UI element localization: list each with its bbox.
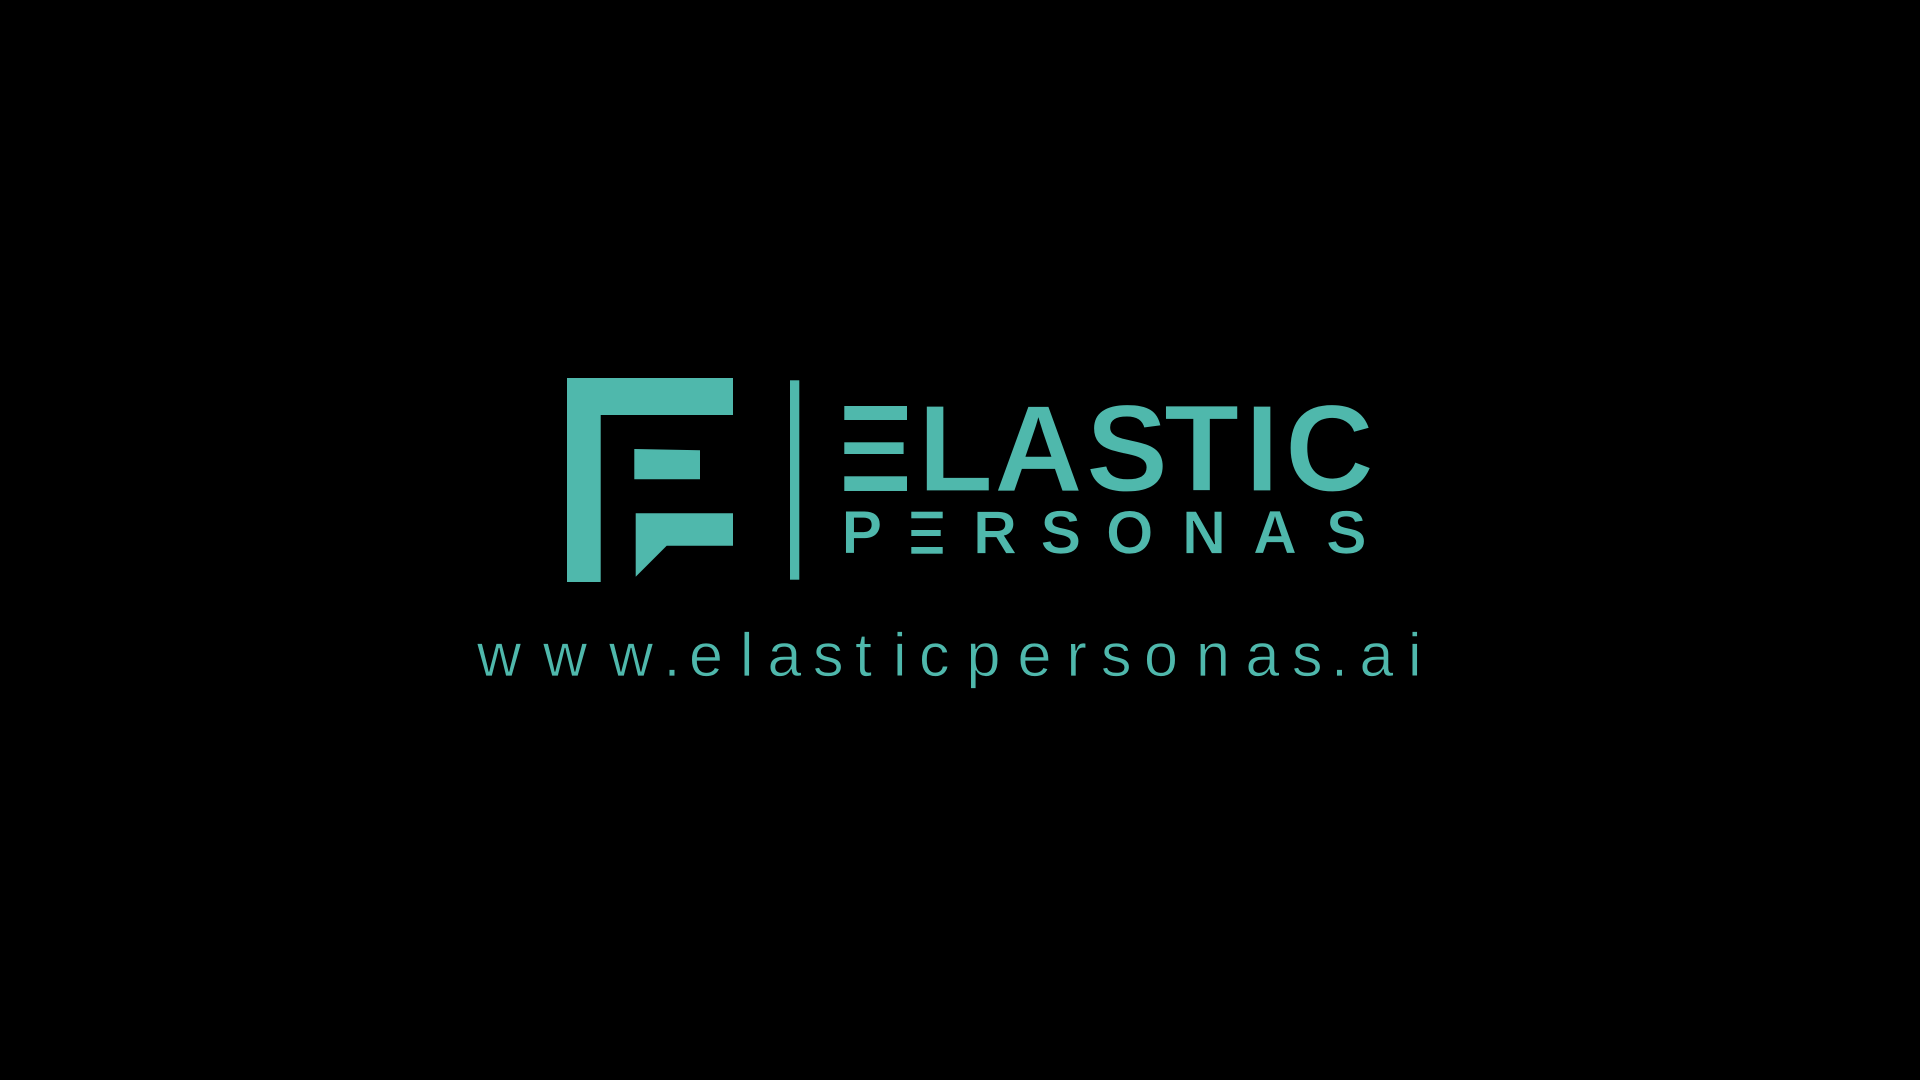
wordmark: PERSONAS: P E RSONAS: [842, 499, 1367, 567]
website url: www.elasticpersonas.ai: [476, 621, 1422, 689]
logo lockup: [567, 378, 1374, 582]
icon: F speech-bubble mark: [567, 378, 733, 582]
vertical divider: [790, 380, 799, 580]
